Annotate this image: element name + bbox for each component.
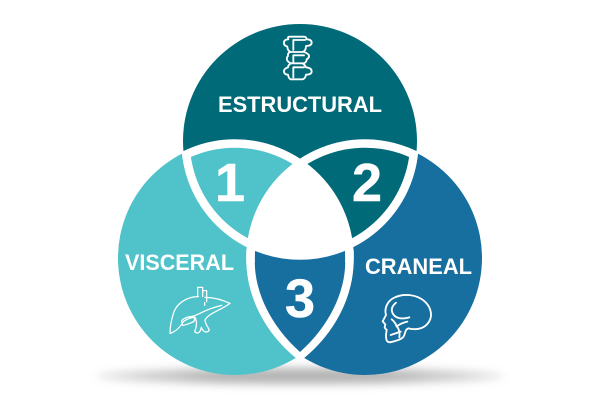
venn diagram infographic — [100, 24, 500, 390]
white band: lower crossing — [250, 250, 350, 372]
heading: estructural: ESTRUCTURAL — [218, 92, 382, 117]
white ring: visceral — [184, 139, 354, 316]
overlap region 1 — [191, 148, 292, 238]
white ring: estructural — [182, 153, 418, 260]
icon: liver — [170, 287, 230, 333]
overlap region 3 — [248, 141, 482, 375]
heading: craneal: CRANEAL — [365, 254, 472, 279]
circle: craneal — [248, 141, 482, 375]
icon: skull — [383, 295, 431, 342]
region 3 lower tip — [255, 262, 345, 352]
number 2: 2 — [352, 153, 382, 213]
number 1: 1 — [215, 153, 245, 213]
ground shadow — [95, 368, 505, 384]
circle: estructural — [183, 24, 417, 258]
heading: visceral: VISCERAL — [125, 250, 234, 275]
white ring: craneal — [246, 139, 416, 322]
number 3: 3 — [285, 269, 315, 329]
centre white region — [256, 169, 344, 252]
circle: visceral — [118, 141, 352, 375]
icon: spine — [284, 37, 312, 79]
